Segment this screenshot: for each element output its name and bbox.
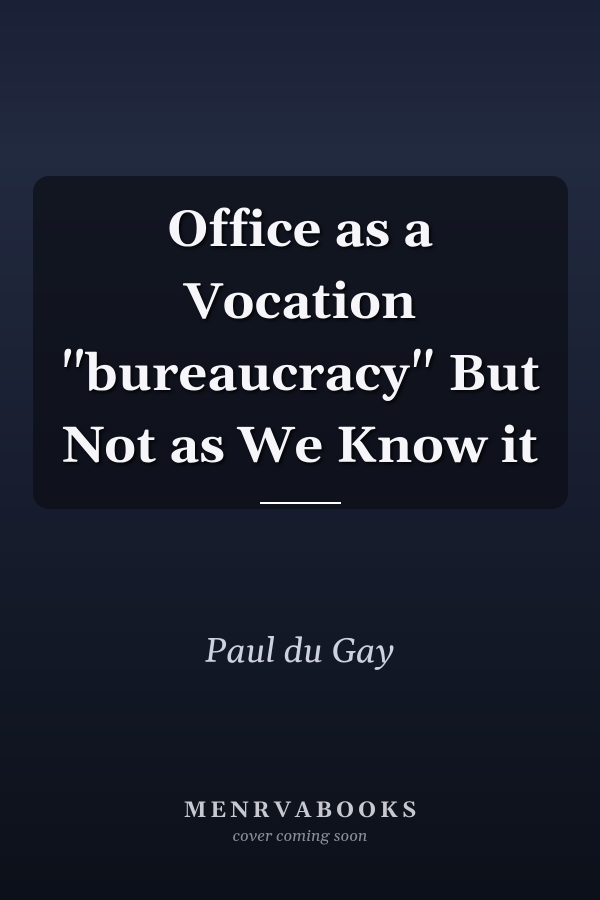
- title: Vocation: [184, 272, 416, 336]
- title: Office as a: [167, 200, 433, 264]
- author: Paul du Gay: [205, 630, 395, 674]
- title: Not as We Know it: [62, 416, 538, 480]
- title: "bureaucracy" But: [60, 344, 540, 408]
- panel: title backdrop: [33, 176, 568, 509]
- publisher name: MENRVABOOKS: [184, 797, 420, 825]
- title rule: [260, 502, 341, 504]
- cover note: cover coming soon: [233, 826, 367, 847]
- title: [60, 200, 540, 480]
